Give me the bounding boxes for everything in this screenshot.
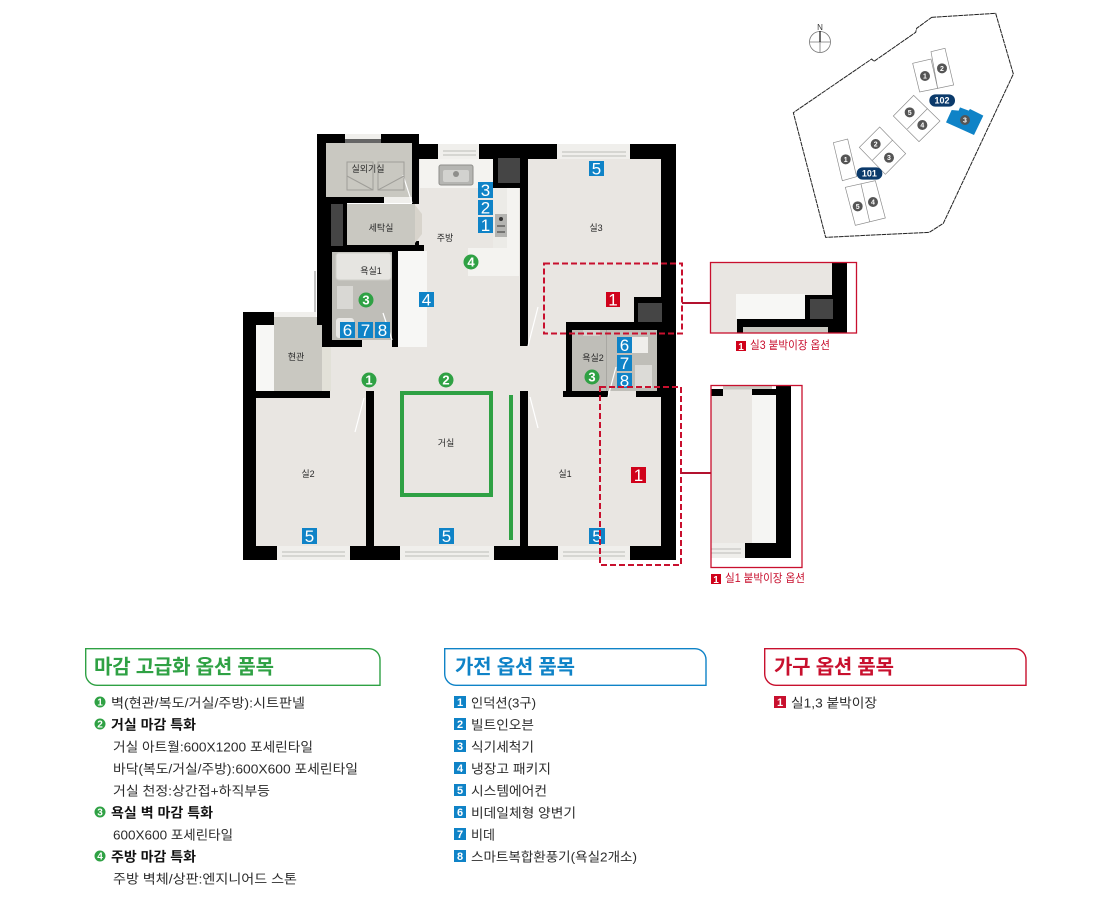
list: 냉장고 패키지: [471, 762, 551, 776]
green finish markers: 1: [365, 372, 373, 388]
room labels: [288, 163, 604, 479]
laundry door: [415, 205, 422, 243]
unit number markers: [841, 63, 970, 211]
red furniture markers: 1: [634, 466, 643, 485]
list: 주방 벽체/상판:엔지니어드 스톤: [113, 872, 297, 886]
unit number markers: 1: [844, 157, 848, 164]
room labels: 욕실2: [582, 353, 604, 363]
building outlines: [833, 48, 954, 225]
list: 3: [457, 741, 463, 753]
heading: 가전 옵션 품목: [455, 656, 575, 678]
unit number markers: 2: [874, 141, 878, 148]
inset caption: room 1: [711, 572, 805, 586]
green finish markers: 3: [588, 370, 596, 384]
panel: furniture options: [765, 649, 1026, 710]
list: 4: [457, 763, 464, 775]
utility room equipment outlines: [347, 162, 404, 190]
panel: finishing upgrade options: [86, 649, 380, 886]
list: 600X600 포세린타일: [113, 828, 233, 842]
blue appliance markers: 2: [481, 198, 490, 218]
inset caption: room 1: 실1 붙박이장 옵션: [725, 572, 805, 585]
bathroom floors: [332, 252, 657, 391]
list: 인덕션(3구): [471, 696, 536, 710]
list: [454, 696, 637, 864]
list: 2: [97, 720, 103, 730]
list: 바닥(복도/거실/주방):600X600 포세린타일: [113, 762, 358, 776]
bathroom 1 fixtures: [336, 253, 391, 338]
room labels: 세탁실: [369, 222, 393, 233]
list: 7: [457, 829, 463, 841]
floor areas: [256, 159, 661, 546]
dashed callout box: room 3: [544, 264, 682, 334]
doors: [355, 175, 616, 432]
unit number markers: 4: [920, 122, 924, 129]
compass: N: [817, 23, 823, 32]
black walls: [243, 134, 676, 560]
room labels: 거실: [438, 438, 454, 448]
inset caption: room 3: [736, 339, 830, 353]
room labels: 욕실1: [360, 266, 382, 276]
blue appliance markers: 8: [378, 321, 387, 340]
building label 102: 102: [934, 96, 949, 106]
list: 비데: [471, 828, 495, 842]
living room green art wall frame: [402, 393, 491, 495]
building label 101: 101: [862, 169, 877, 179]
list: 비데일체형 양변기: [471, 806, 576, 820]
blue appliance markers: 5: [442, 527, 451, 546]
blue appliance markers: 8: [620, 372, 629, 390]
green finish markers: [358, 254, 600, 388]
list: 4: [97, 852, 103, 862]
kitchen counters: [420, 159, 519, 276]
list: 식기세척기: [471, 740, 534, 754]
connector: room 3 to inset: [682, 302, 711, 304]
blue appliance markers: 6: [343, 321, 352, 340]
site boundary: [793, 13, 1013, 237]
unit number markers: 3: [963, 117, 967, 124]
blue appliance markers: 1: [481, 216, 490, 235]
refrigerator: [398, 251, 427, 347]
blue appliance markers: 5: [592, 527, 602, 546]
green finish markers: 2: [442, 372, 450, 388]
list: 빌트인오븐: [471, 718, 534, 732]
list: 시스템에어컨: [471, 784, 547, 798]
blue appliance markers: [302, 160, 632, 546]
blue appliance markers: 6: [620, 336, 629, 355]
room labels: 실3: [589, 223, 603, 233]
inset caption: room 1: 1: [713, 575, 719, 586]
blue appliance markers: 3: [481, 181, 490, 200]
unit number markers: 3: [887, 155, 891, 162]
list: 5: [457, 785, 463, 797]
inset: room 1 built-in closet: [711, 386, 802, 568]
blue appliance markers: 5: [592, 160, 601, 178]
red furniture markers: [606, 290, 646, 485]
unit number markers: 2: [940, 66, 944, 73]
list: 스마트복합환풍기(욕실2개소): [471, 850, 637, 864]
list: 2: [457, 719, 463, 731]
list: 실1,3 붙박이장: [791, 696, 877, 710]
building label 102: [929, 94, 955, 107]
icon: cooktop: [495, 214, 507, 237]
list: 8: [457, 851, 463, 863]
room labels: 실2: [301, 469, 315, 479]
utility rooms: [274, 143, 415, 391]
blue appliance markers: 4: [422, 290, 431, 310]
blue appliance markers: 5: [305, 527, 314, 546]
list: 3: [97, 808, 103, 818]
red furniture markers: 1: [608, 290, 618, 310]
entrance rail: [314, 271, 316, 312]
list: 1: [777, 697, 783, 709]
heading: 마감 고급화 옵션 품목: [94, 656, 274, 678]
list: 거실 마감 특화: [111, 718, 197, 732]
room labels: 주방: [437, 233, 453, 243]
floor plan: [243, 134, 682, 565]
compass: [810, 23, 830, 52]
list: 벽(현관/복도/거실/주방):시트판넬: [111, 696, 305, 710]
inset: room 3 built-in closet: [710, 262, 856, 333]
unit number markers: 4: [871, 199, 875, 206]
heading box: [445, 649, 706, 685]
list: 1: [457, 697, 463, 709]
shafts: [331, 158, 662, 322]
list: [94, 696, 358, 886]
dashed callout box: room 1: [600, 387, 681, 565]
unit number markers: 1: [923, 73, 927, 80]
blue appliance markers: 7: [361, 321, 370, 340]
icon: kitchen sink: [439, 165, 473, 185]
list: 주방 마감 특화: [111, 850, 197, 864]
unit number markers: 5: [908, 110, 912, 117]
heading: 가구 옵션 품목: [774, 656, 894, 678]
heading box: [86, 649, 380, 685]
inset caption: room 3: 실3 붙박이장 옵션: [750, 339, 830, 352]
connector: room 1 to inset: [681, 472, 711, 474]
site plan: [793, 13, 1013, 237]
panel: appliance options: [445, 649, 706, 864]
unit number markers: 5: [856, 204, 860, 211]
living room green wall line: [509, 395, 513, 540]
list: 6: [457, 807, 463, 819]
room labels: 실1: [558, 469, 572, 479]
list: 거실 아트월:600X1200 포세린타일: [113, 740, 313, 754]
list: 1: [97, 698, 103, 708]
heading box: [765, 649, 1026, 685]
green finish markers: 4: [467, 254, 475, 270]
highlighted unit 3: [946, 107, 983, 135]
room labels: 실외기실: [351, 163, 385, 174]
windows: [274, 134, 630, 560]
green finish markers: 3: [362, 292, 370, 308]
blue appliance markers: 7: [620, 354, 629, 373]
list: 욕실 벽 마감 특화: [111, 806, 214, 820]
room labels: 현관: [288, 352, 304, 362]
inset caption: room 3: 1: [738, 342, 744, 353]
bathroom 2 fixtures: [583, 330, 652, 391]
list: 거실 천정:상간접+하직부등: [113, 784, 270, 798]
building label 101: [857, 167, 882, 180]
